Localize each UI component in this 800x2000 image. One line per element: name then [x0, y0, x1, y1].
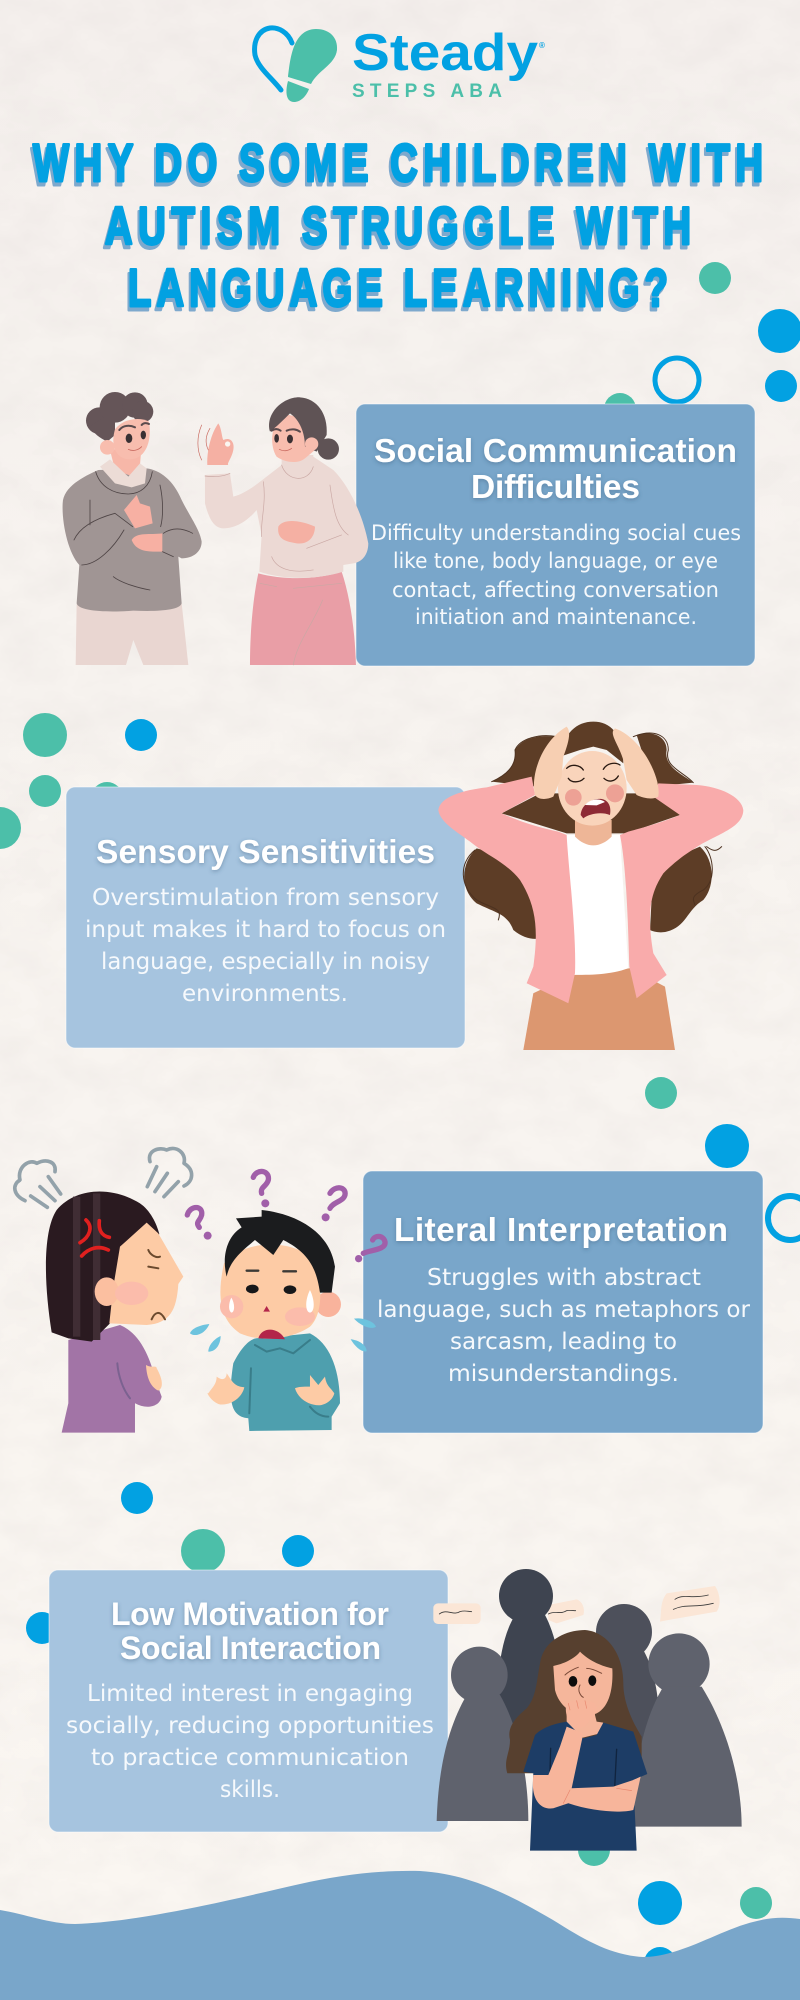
title text	[33, 133, 763, 317]
text block: literal interpretation description: misunderstandings.	[448, 1361, 679, 1387]
text block: sensory description: Overstimulation from sensory	[92, 885, 439, 911]
logo tagline: STEPS ABA	[352, 81, 502, 102]
text block: low motivation description: Limited interest in engaging	[87, 1681, 413, 1707]
illustration: anxious girl in front of crowd silhouettes	[433, 1569, 742, 1851]
title text: AUTISM STRUGGLE WITH	[105, 196, 691, 255]
illustration: angry girl and confused boy	[15, 1149, 385, 1433]
text block: low motivation description: socially, reducing opportunities	[66, 1713, 434, 1739]
heading: low motivation for social interaction: Low Motivation for	[111, 1596, 389, 1632]
text block: social communication description: contact, affecting conversation	[392, 578, 719, 603]
icon: question marks	[187, 1171, 385, 1253]
text block: low motivation description	[66, 1681, 434, 1803]
registered mark: ®	[539, 41, 545, 50]
man	[63, 392, 202, 665]
title shadow: AUTISM STRUGGLE WITH	[103, 200, 689, 259]
trousers	[523, 968, 675, 1050]
text block: low motivation description: to practice communication	[91, 1745, 409, 1771]
cardigan	[438, 777, 743, 1003]
title shadow: LANGUAGE LEARNING?	[126, 262, 666, 321]
heading: social communication difficulties: Social Communication	[374, 433, 737, 470]
hair	[463, 733, 722, 939]
anxious girl	[506, 1630, 647, 1851]
title text: LANGUAGE LEARNING?	[128, 258, 668, 317]
title shadow	[31, 137, 761, 321]
text block: literal interpretation description	[377, 1265, 751, 1387]
text block: social communication description	[371, 521, 741, 630]
text block: social communication description: initiation and maintenance.	[415, 605, 697, 630]
panel: sensory sensitivities	[66, 787, 465, 1048]
text block: sensory description	[85, 885, 446, 1007]
heading: sensory sensitivities: Sensory Sensitivities	[96, 834, 435, 871]
text block: social communication description: like tone, body language, or eye	[393, 549, 718, 574]
confused boy	[207, 1210, 341, 1431]
icon: sweat drops	[190, 1318, 376, 1352]
logo: Steady Steps ABA	[255, 24, 545, 102]
title text: WHY DO SOME CHILDREN WITH	[33, 133, 763, 192]
text block: literal interpretation description: language, such as metaphors or	[377, 1297, 751, 1323]
illustration: overwhelmed woman holding her head	[438, 722, 743, 1050]
text block: literal interpretation description: Struggles with abstract	[427, 1265, 701, 1291]
shirt	[567, 835, 628, 975]
heading: low motivation for social interaction: Social Interaction	[120, 1630, 381, 1666]
text block: sensory description: language, especially in noisy	[101, 949, 430, 975]
heading: social communication difficulties: Difficulties	[471, 469, 640, 506]
icon: heart outline and footprint	[255, 28, 337, 102]
woman with OK gesture	[198, 397, 368, 665]
text block: literal interpretation description: sarcasm, leading to	[450, 1329, 677, 1355]
heading: low motivation for social interaction	[111, 1596, 389, 1666]
text block: sensory description: input makes it hard to focus on	[85, 917, 446, 943]
title	[31, 133, 763, 321]
text block: sensory description: environments.	[182, 981, 348, 1007]
icon: question mark dots	[204, 1199, 362, 1262]
icon: steam puffs	[15, 1149, 192, 1207]
illustration: man and woman talking	[63, 392, 368, 665]
text block: low motivation description: skills.	[220, 1777, 280, 1803]
head and hands	[534, 722, 659, 845]
text block: social communication description: Difficulty understanding social cues	[371, 521, 741, 546]
panel: social communication difficulties	[356, 404, 755, 666]
speech bubbles	[433, 1586, 720, 1624]
heading: social communication difficulties	[374, 433, 737, 506]
logo wordmark: Steady	[352, 24, 538, 82]
angry girl	[46, 1192, 183, 1433]
crowd silhouettes	[437, 1569, 742, 1827]
heading: literal interpretation: Literal Interpretation	[394, 1212, 728, 1249]
title shadow: WHY DO SOME CHILDREN WITH	[31, 137, 761, 196]
bottom wave	[0, 1871, 800, 2000]
panel: literal interpretation	[363, 1171, 763, 1433]
panel: low motivation for social interaction	[49, 1570, 448, 1832]
